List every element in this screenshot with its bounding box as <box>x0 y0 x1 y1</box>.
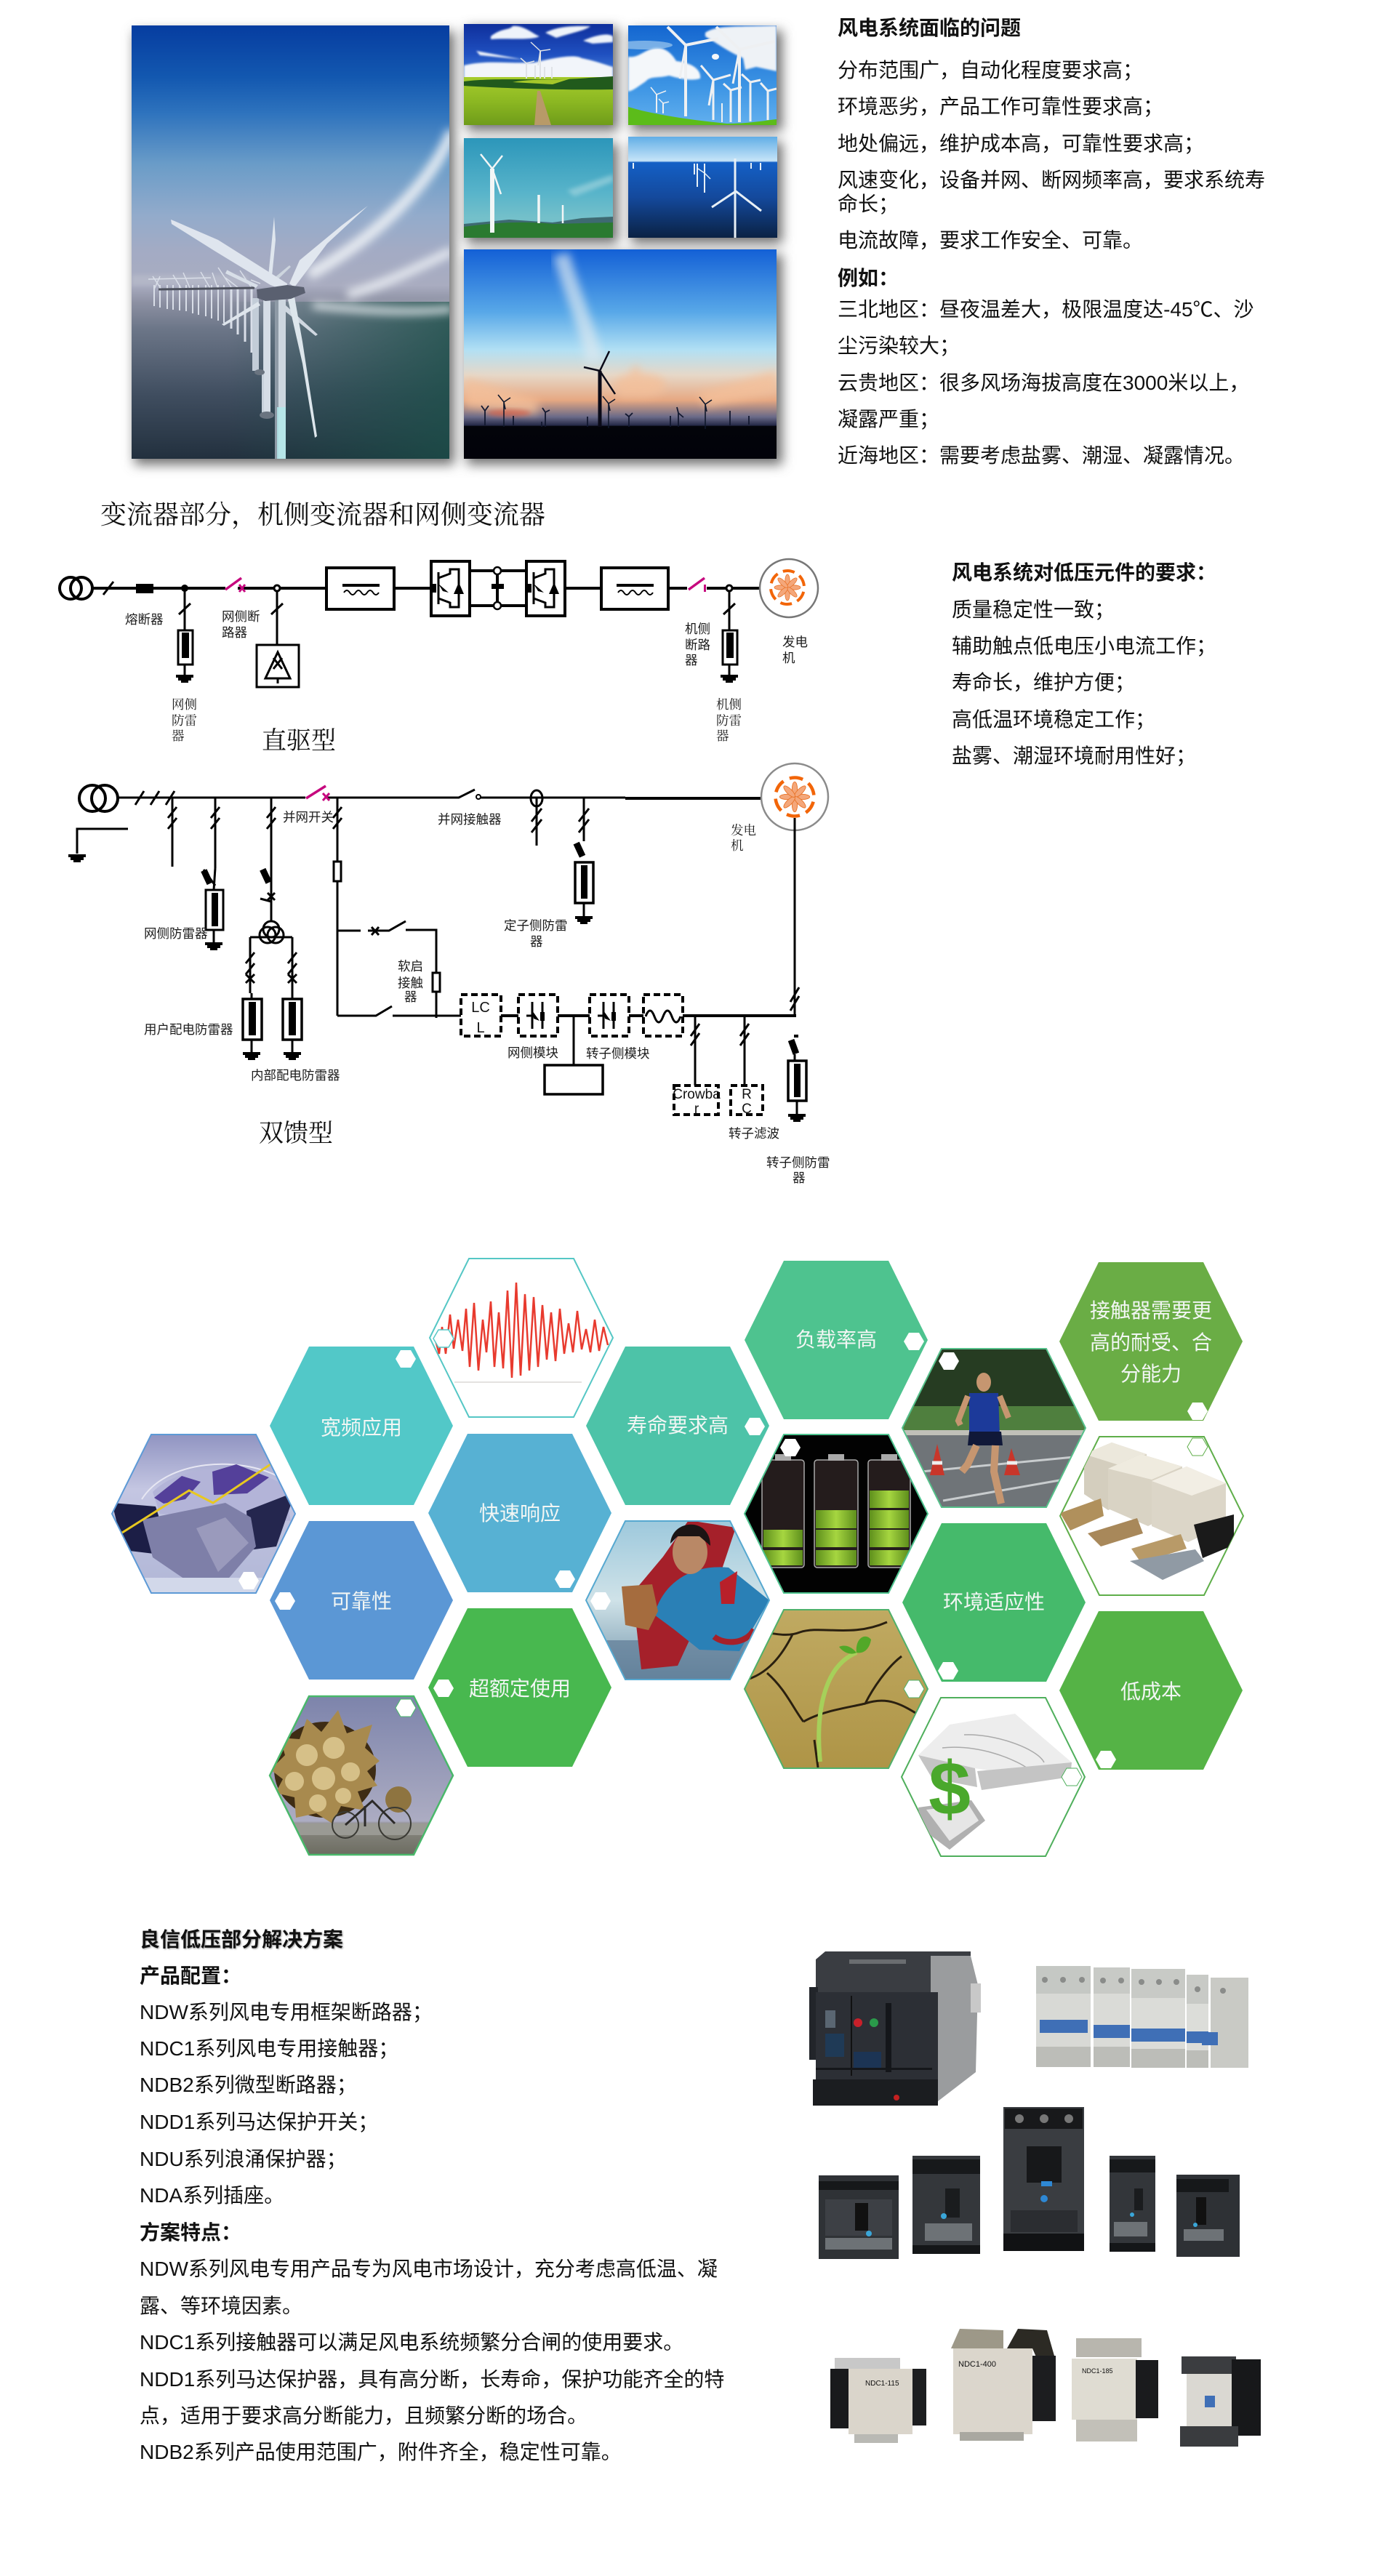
labels: doubly-fed diagram: 器 <box>793 1171 806 1185</box>
labels: doubly-fed diagram: 网侧模块 <box>508 1046 558 1060</box>
text block: requirements for LV components: 盐雾、潮湿环境耐用性好； <box>952 740 1196 769</box>
hex: handshake photo <box>109 1432 298 1595</box>
hex: superman photo <box>583 1519 772 1684</box>
symbol: arrester left <box>176 630 193 683</box>
label: grid arrester: 网侧 <box>172 697 197 712</box>
main turbine <box>278 300 286 459</box>
symbol: filter box 1 <box>326 568 394 609</box>
text block: Liangxin LV solution: 方案特点： <box>140 2217 241 2246</box>
text block: wind system problems: 风电系统面临的问题 <box>838 17 1021 39</box>
label: grid breaker: 网侧断 <box>222 609 260 624</box>
text block: wind system problems <box>838 17 1265 469</box>
product: MCCB 4 <box>1110 2156 1155 2252</box>
icon: generator <box>760 559 818 617</box>
product: MCCB 3 <box>1003 2107 1084 2251</box>
label: machine breaker: 断路 <box>685 638 710 652</box>
label: doubly fed: 双馈型 <box>259 1120 333 1147</box>
text block: wind system problems: 凝露严重； <box>838 404 939 433</box>
text block: requirements for LV components: 高低温环境稳定工作； <box>952 704 1155 733</box>
label: machine breaker <box>685 622 710 667</box>
product: MCCB 5 <box>1176 2175 1240 2257</box>
hex: contactor needs: 高的耐受、合 <box>1090 1331 1212 1354</box>
panel: wind turbine photo collage <box>132 24 782 465</box>
symbol: IGBT module 2 <box>526 561 565 616</box>
symbol: IGBT module 1 <box>431 561 470 616</box>
text block: requirements for LV components: 辅助触点低电压小电流工作； <box>952 630 1216 659</box>
hex: contactor needs <box>1059 1262 1243 1421</box>
label: grid breaker: 路器 <box>222 625 247 640</box>
symbol: arrester right <box>721 630 738 683</box>
hex: contactor needs: 接触器需要更 <box>1090 1299 1212 1322</box>
symbol: RC <box>731 1086 763 1117</box>
hex: long life <box>586 1347 769 1505</box>
hex: over-rated use: 超额定使用 <box>469 1677 571 1700</box>
symbol: crowbar: r <box>694 1102 699 1117</box>
text block: Liangxin LV solution: NDW系列风电专用框架断路器； <box>140 1997 433 2026</box>
labels: doubly-fed diagram: 发电 <box>731 823 756 838</box>
photo: teal sky turbines <box>464 138 613 238</box>
text block: Liangxin LV solution: NDD1系列马达保护器，具有高分断，长寿命，保护功能齐全的特 <box>140 2364 724 2393</box>
hex: wide band application <box>270 1347 453 1505</box>
symbol: LC filter: LC <box>471 1000 490 1016</box>
product: contactor NDC1-185: NDC1-185 <box>1082 2367 1113 2375</box>
symbol: distribution branch <box>243 868 302 1060</box>
text block: wind system problems: 电流故障，要求工作安全、可靠。 <box>838 229 1143 252</box>
text block: wind system problems: 近海地区：需要考虑盐雾、潮湿、凝露情况。 <box>838 440 1245 469</box>
product: contactor NDC1-185 <box>1072 2338 1158 2441</box>
symbol: ground <box>68 829 128 862</box>
heading: converter section: 变流器部分，机侧变流器和网侧变流器 <box>100 500 545 529</box>
text block: Liangxin LV solution: NDW系列风电专用产品专为风电市场设计，充分考虑高低温、凝 <box>140 2253 718 2282</box>
product: contactor NDC2-150 <box>1180 2356 1261 2447</box>
hex: over-rated use <box>428 1608 611 1767</box>
photo: green hill turbines <box>464 24 613 125</box>
text block: requirements for LV components <box>952 557 1216 769</box>
hex: puzzle photo: $ <box>928 1747 971 1831</box>
label: generator: 机 <box>782 651 795 665</box>
symbol: machine breaker <box>689 578 706 592</box>
hex: contactor photo <box>1060 1437 1243 1595</box>
label: direct drive: 直驱型 <box>262 727 336 755</box>
symbol: LC filter: L <box>476 1020 485 1036</box>
labels: doubly-fed diagram: 器 <box>404 990 417 1004</box>
symbol: filter box 2 <box>601 568 668 609</box>
labels: doubly-fed diagram: 器 <box>530 934 542 949</box>
second-turbine blades <box>268 217 276 276</box>
hex: high load rate <box>745 1261 928 1419</box>
hex: wide band application: 宽频应用 <box>321 1416 402 1439</box>
hex: environmental adaptability: 环境适应性 <box>943 1591 1045 1613</box>
label: generator <box>782 635 808 665</box>
hex: environmental adaptability <box>902 1523 1086 1682</box>
text block: requirements for LV components: 质量稳定性一致； <box>952 594 1115 623</box>
text block: Liangxin LV solution: NDC1系列风电专用接触器； <box>140 2033 398 2062</box>
text block: Liangxin LV solution <box>140 1928 724 2465</box>
text block: wind system problems: 三北地区：昼夜温差大，极限温度达-45℃、沙 <box>838 294 1254 323</box>
product: contactor NDC1-400 <box>951 2329 1056 2441</box>
icon: generator <box>761 763 828 830</box>
labels: doubly-fed diagram: 转子滤波 <box>729 1126 779 1141</box>
symbol: transformer <box>79 785 118 811</box>
symbol: grid breaker <box>225 578 245 592</box>
row of turbines <box>148 268 260 353</box>
hex: drought sprout photo <box>742 1608 931 1770</box>
text block: Liangxin LV solution: 露、等环境因素。 <box>140 2295 302 2317</box>
text block: requirements for LV components: 风电系统对低压元件的要求： <box>952 557 1216 586</box>
symbol: rotor reactor <box>643 995 683 1036</box>
labels: doubly-fed diagram: 并网接触器 <box>438 812 502 827</box>
label: generator: 发电 <box>782 635 808 649</box>
text block: Liangxin LV solution: NDC1系列接触器可以满足风电系统频繁分合闸的使用要求。 <box>140 2331 683 2354</box>
hex: battery photo <box>742 1432 931 1595</box>
label: machine breaker: 器 <box>685 653 698 667</box>
label: grid arrester: 防雷 <box>172 713 197 728</box>
hex: reliability <box>270 1521 453 1680</box>
text block: wind system problems: 风速变化，设备并网、断网频率高，要求系统寿 <box>838 169 1265 191</box>
hex: contactor needs: 分能力 <box>1120 1363 1182 1385</box>
label: machine arrester: 防雷 <box>716 713 742 728</box>
hex: bicycle load photo <box>267 1694 456 1857</box>
text block: Liangxin LV solution: NDU系列浪涌保护器； <box>140 2143 347 2172</box>
text block: Liangxin LV solution: NDD1系列马达保护开关； <box>140 2106 378 2135</box>
label: machine breaker: 机侧 <box>685 622 710 636</box>
photo: sea turbines <box>628 137 777 238</box>
hex: high load rate: 负载率高 <box>795 1328 877 1351</box>
hex: reliability: 可靠性 <box>331 1590 392 1613</box>
product: air circuit breaker <box>809 1951 981 2106</box>
symbol: RC: R <box>742 1087 752 1102</box>
text block: Liangxin LV solution: NDA系列插座。 <box>140 2184 284 2207</box>
label: fuse: 熔断器 <box>125 612 163 627</box>
symbol: crowbar: Crowba <box>673 1087 721 1102</box>
hex: long life: 寿命要求高 <box>627 1414 729 1437</box>
photo: large offshore turbine <box>132 25 452 459</box>
diagram: doubly-fed type <box>68 763 830 1185</box>
labels: doubly-fed diagram: 用户配电防雷器 <box>144 1022 233 1037</box>
photo: blue sky turbines <box>614 25 777 125</box>
symbol: RC: C <box>742 1102 752 1117</box>
symbol: transformer <box>60 577 92 599</box>
panel: product photos <box>809 1951 1261 2447</box>
text block: Liangxin LV solution: 产品配置： <box>140 1960 241 1989</box>
label: grid arrester <box>172 697 197 743</box>
box: DC link <box>545 1065 603 1094</box>
label: grid breaker <box>222 609 260 640</box>
label: machine arrester <box>716 697 742 743</box>
text block: wind system problems: 分布范围广，自动化程度要求高； <box>838 59 1143 81</box>
text block: Liangxin LV solution: NDB2系列微型断路器； <box>140 2069 357 2098</box>
hex: low cost: 低成本 <box>1120 1680 1182 1703</box>
symbol: rotor arrester <box>788 1035 806 1122</box>
hex: runner photo <box>899 1347 1088 1509</box>
panel: hexagon feature grid <box>109 1259 1243 1857</box>
label: grid arrester: 器 <box>172 729 185 743</box>
labels: doubly-fed diagram: 机 <box>731 838 743 853</box>
text block: Liangxin LV solution: NDB2系列产品使用范围广，附件齐全，稳定性可靠。 <box>140 2436 622 2465</box>
hex: waveform chart <box>430 1259 613 1417</box>
text block: wind system problems: 环境恶劣，产品工作可靠性要求高； <box>838 95 1163 118</box>
text block: wind system problems: 尘污染较大； <box>838 330 960 359</box>
photo: sunset turbines <box>464 249 777 459</box>
product: contactor NDC1-115 <box>830 2358 926 2443</box>
diagram: direct-drive type <box>60 559 818 755</box>
symbol: rotor module <box>590 995 629 1036</box>
text block: Liangxin LV solution: 点，适用于要求高分断能力，且频繁分断的场合。 <box>140 2400 587 2429</box>
symbol: soft start branch <box>337 921 461 1018</box>
labels: doubly-fed diagram: 转子侧防雷 <box>766 1155 830 1170</box>
symbol: grid arrester <box>201 868 223 950</box>
label: machine arrester: 机侧 <box>716 697 742 712</box>
symbol: stator branch <box>531 790 593 924</box>
symbol: triangle filter <box>257 645 299 687</box>
labels: doubly-fed diagram: 并网开关 <box>283 810 334 824</box>
product: MCCB 1 <box>819 2175 899 2259</box>
hex: puzzle photo <box>902 1698 1085 1856</box>
labels: doubly-fed diagram: 网侧防雷器 <box>144 926 208 941</box>
labels: doubly-fed diagram: 内部配电防雷器 <box>251 1068 340 1083</box>
collage shadows <box>135 28 782 465</box>
labels: doubly-fed diagram: 接触 <box>398 976 423 990</box>
symbol: LC filter <box>461 995 501 1036</box>
labels: doubly-fed diagram <box>144 810 830 1185</box>
text block: wind system problems: 命长； <box>838 193 899 215</box>
hex: fast response <box>428 1434 611 1592</box>
text block: wind system problems: 地处偏远，维护成本高，可靠性要求高； <box>838 132 1204 155</box>
product: MCCB 2 <box>912 2156 980 2254</box>
labels: doubly-fed diagram: 转子侧模块 <box>586 1046 650 1061</box>
product: miniature circuit breakers <box>1036 1966 1248 2068</box>
product: contactor NDC1-115: NDC1-115 <box>865 2380 899 2388</box>
text block: wind system problems: 例如： <box>838 262 899 292</box>
hex: low cost <box>1059 1611 1243 1770</box>
label: machine arrester: 器 <box>716 729 729 743</box>
text block: requirements for LV components: 寿命长，维护方便； <box>952 667 1135 696</box>
labels: doubly-fed diagram: 软启 <box>398 959 423 974</box>
labels: doubly-fed diagram: 定子侧防雷 <box>504 918 567 933</box>
symbol: grid module <box>518 995 558 1036</box>
hex: fast response: 快速响应 <box>479 1502 561 1525</box>
product: contactor NDC1-400: NDC1-400 <box>958 2360 996 2369</box>
text block: Liangxin LV solution: 良信低压部分解决方案 <box>140 1928 343 1951</box>
symbol: main breaker <box>306 786 329 801</box>
symbol: crowbar <box>673 1086 721 1117</box>
text block: wind system problems: 云贵地区：很多风场海拔高度在3000米以上， <box>838 367 1249 396</box>
